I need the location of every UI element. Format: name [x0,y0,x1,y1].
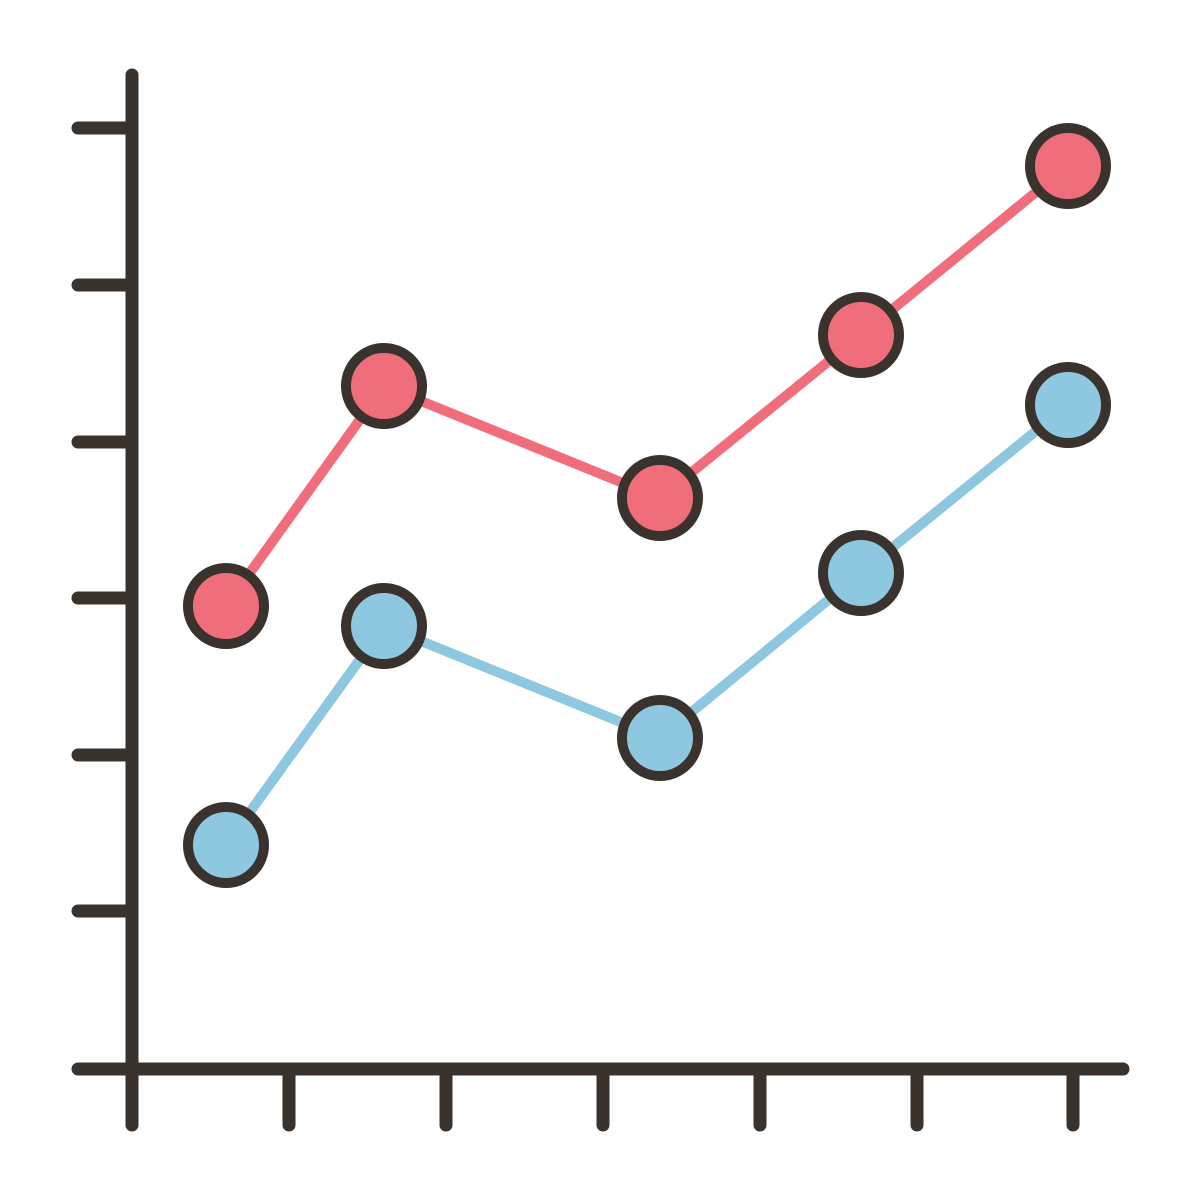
series: blue line [188,367,1106,883]
series: red line [188,128,1106,644]
axes [78,75,1123,1125]
